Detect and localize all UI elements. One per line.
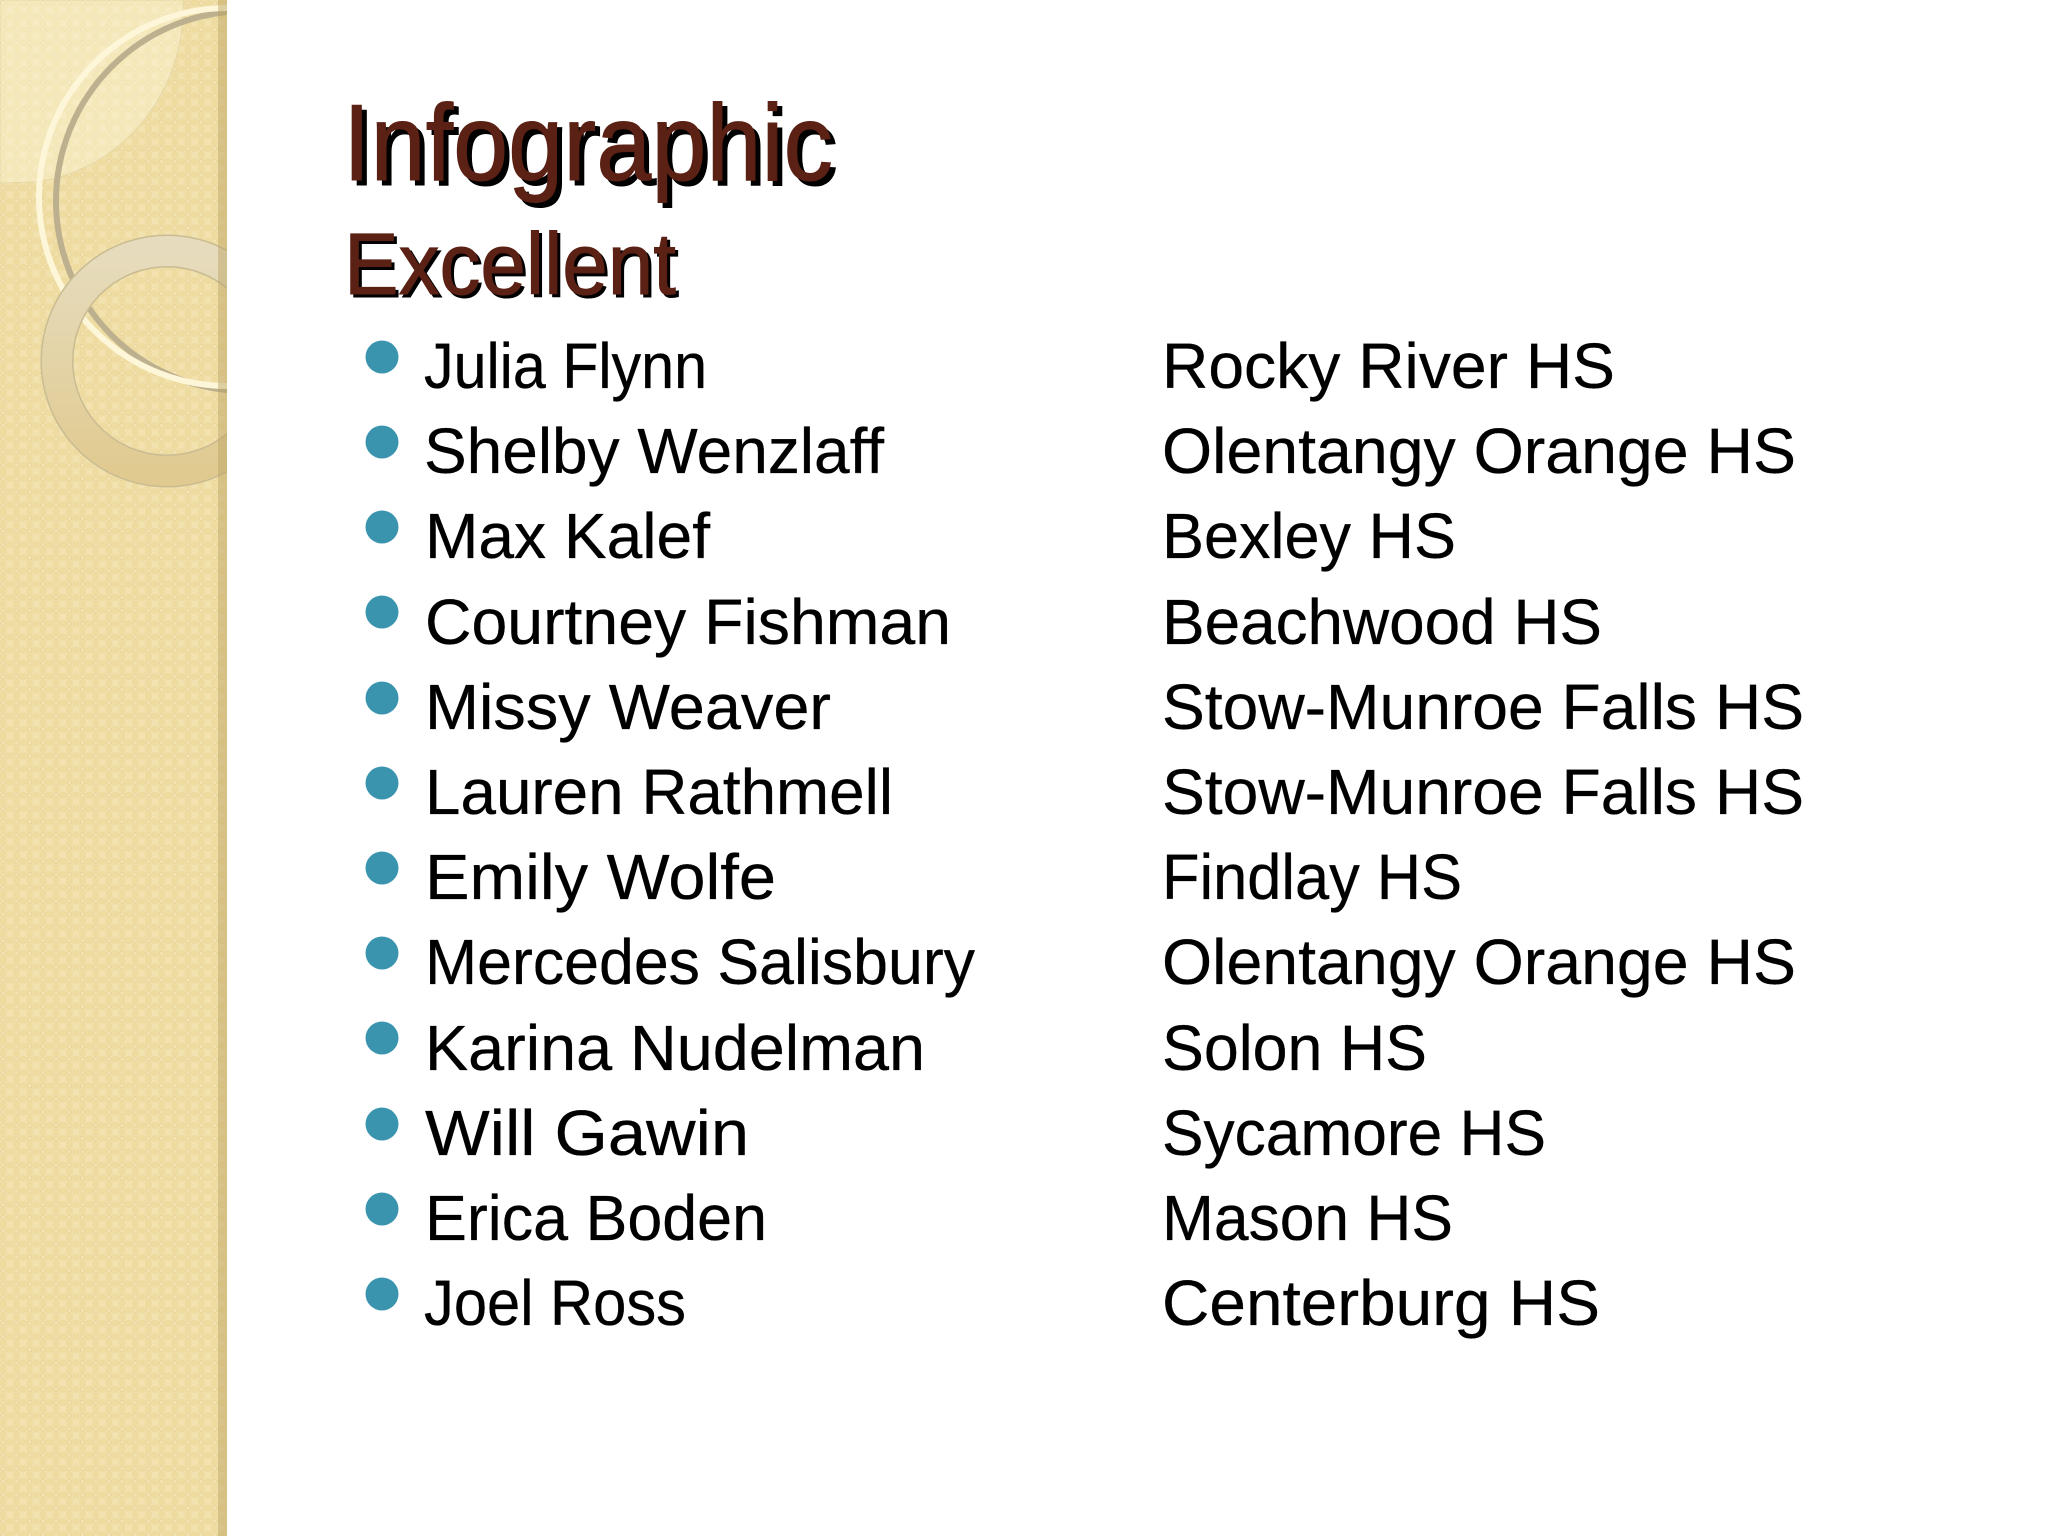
subtitle: Excellent [344,216,676,313]
row: Joel Ross: Centerburg HS [1162,1267,1600,1339]
row: Shelby Wenzlaff [366,415,1796,487]
row: Courtney Fishman: Beachwood HS [1162,586,1602,658]
row: Max Kalef: Max Kalef [425,500,710,572]
row: Courtney Fishman [366,586,1602,658]
row: Emily Wolfe [366,841,1462,913]
title: Infographic [343,82,833,204]
row: Emily Wolfe: Findlay HS [1162,841,1462,913]
row: Karina Nudelman: Karina Nudelman [425,1012,925,1084]
row: Lauren Rathmell [366,756,1804,828]
row: Julia Flynn: Julia Flynn [424,330,707,402]
row: Lauren Rathmell: Lauren Rathmell [425,756,893,828]
list: award winners and schools [366,330,1804,1339]
row: Will Gawin: Will Gawin [425,1097,749,1169]
row: Erica Boden: Mason HS [1162,1182,1453,1254]
row: Max Kalef: Bexley HS [1162,500,1456,572]
row: Mercedes Salisbury: Mercedes Salisbury [425,926,975,998]
row: Joel Ross: Joel Ross [424,1267,686,1339]
row: Missy Weaver [366,671,1804,743]
row: Karina Nudelman: Solon HS [1162,1012,1427,1084]
row: Will Gawin: Sycamore HS [1162,1097,1546,1169]
row: Shelby Wenzlaff: Olentangy Orange HS [1162,415,1796,487]
row: Lauren Rathmell: Stow-Munroe Falls HS [1162,756,1804,828]
row: Mercedes Salisbury [366,926,1796,998]
row: Courtney Fishman: Courtney Fishman [425,586,951,658]
row: Julia Flynn [366,330,1615,402]
row: Emily Wolfe: Emily Wolfe [425,841,776,913]
row: Erica Boden [366,1182,1453,1254]
row: Joel Ross [366,1267,1600,1339]
row: Karina Nudelman [366,1012,1427,1084]
row: Missy Weaver: Missy Weaver [425,671,831,743]
row: Missy Weaver: Stow-Munroe Falls HS [1162,671,1804,743]
row: Max Kalef [366,500,1456,572]
row: Julia Flynn: Rocky River HS [1162,330,1615,402]
row: Will Gawin [366,1097,1546,1169]
panel: decorative left sidebar [0,0,227,1536]
row: Mercedes Salisbury: Olentangy Orange HS [1162,926,1796,998]
row: Shelby Wenzlaff: Shelby Wenzlaff [424,415,884,487]
row: Erica Boden: Erica Boden [425,1182,767,1254]
